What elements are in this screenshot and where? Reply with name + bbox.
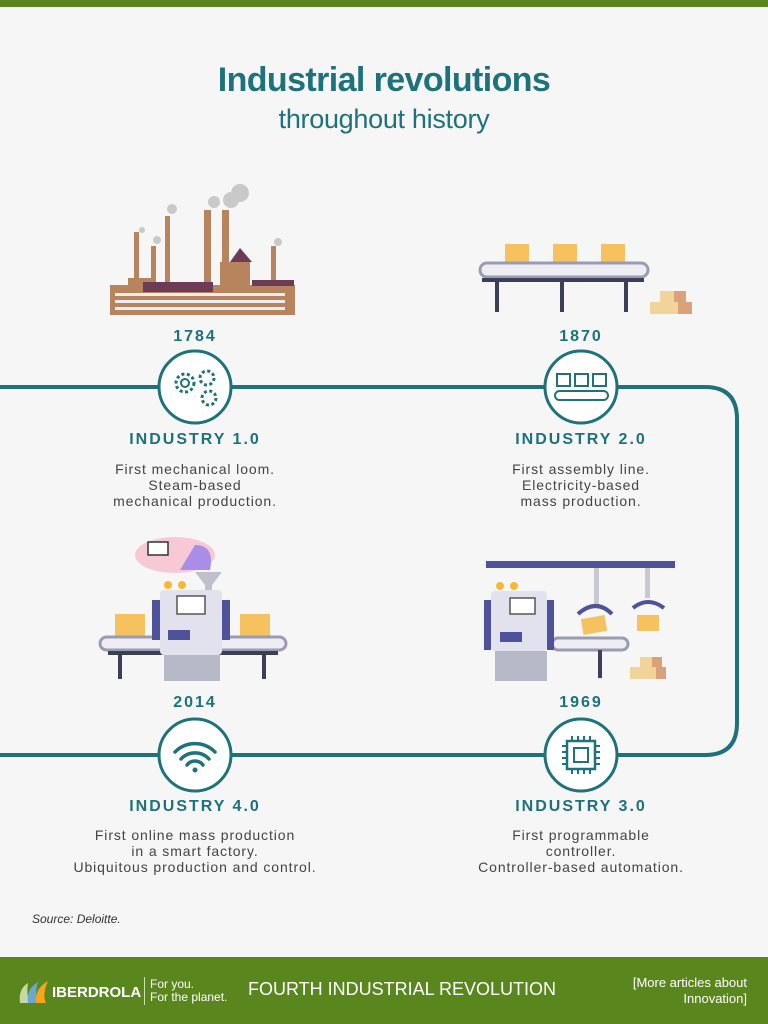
- text 4.0: First online mass production: [95, 827, 295, 843]
- text 1.0: First mechanical loom.: [115, 461, 275, 477]
- text 3.0: [478, 827, 684, 875]
- year 1870: 1870: [559, 328, 603, 345]
- text 3.0: Controller-based automation.: [478, 859, 684, 875]
- title: [218, 61, 550, 134]
- illustration: smart factory 2014: [100, 537, 286, 681]
- text 4.0: [73, 827, 317, 875]
- text 2.0: First assembly line.: [512, 461, 650, 477]
- illustration: automation 1969: [484, 561, 675, 681]
- title: throughout history: [279, 104, 489, 134]
- logo: IBERDROLA: [52, 984, 141, 1001]
- text 1.0: [113, 461, 277, 509]
- heading industry 2.0: INDUSTRY 2.0: [515, 431, 647, 448]
- text 4.0: in a smart factory.: [131, 843, 259, 859]
- year 1784: 1784: [173, 328, 217, 345]
- footer link: Innovation]: [683, 991, 747, 1006]
- text 4.0: Ubiquitous production and control.: [73, 859, 317, 875]
- text 2.0: mass production.: [520, 493, 642, 509]
- heading industry 3.0: INDUSTRY 3.0: [515, 798, 647, 815]
- icon: wifi: [159, 719, 231, 791]
- illustration: assembly line 1870: [480, 244, 692, 314]
- icon: assembly line: [545, 351, 617, 423]
- text 1.0: mechanical production.: [113, 493, 277, 509]
- text 2.0: Electricity-based: [522, 477, 640, 493]
- text 3.0: controller.: [546, 843, 616, 859]
- text 1.0: Steam-based: [148, 477, 242, 493]
- icon: gears: [159, 351, 231, 423]
- title: Industrial revolutions: [218, 61, 550, 99]
- text 2.0: [512, 461, 650, 509]
- logo: [20, 977, 227, 1005]
- icon: chip: [545, 719, 617, 791]
- footer title: FOURTH INDUSTRIAL REVOLUTION: [248, 979, 556, 999]
- text 3.0: First programmable: [512, 827, 650, 843]
- heading industry 4.0: INDUSTRY 4.0: [129, 798, 261, 815]
- source: Source: Deloitte.: [32, 912, 121, 926]
- footer: [0, 957, 768, 1024]
- logo: For you.: [150, 977, 194, 991]
- year 1969: 1969: [559, 694, 603, 711]
- top bar: [0, 0, 768, 7]
- logo: For the planet.: [150, 990, 227, 1004]
- illustration: factory: [110, 184, 295, 315]
- year 2014: 2014: [173, 694, 217, 711]
- heading industry 1.0: INDUSTRY 1.0: [129, 431, 261, 448]
- footer link: [More articles about: [633, 975, 747, 990]
- footer link: [633, 975, 747, 1006]
